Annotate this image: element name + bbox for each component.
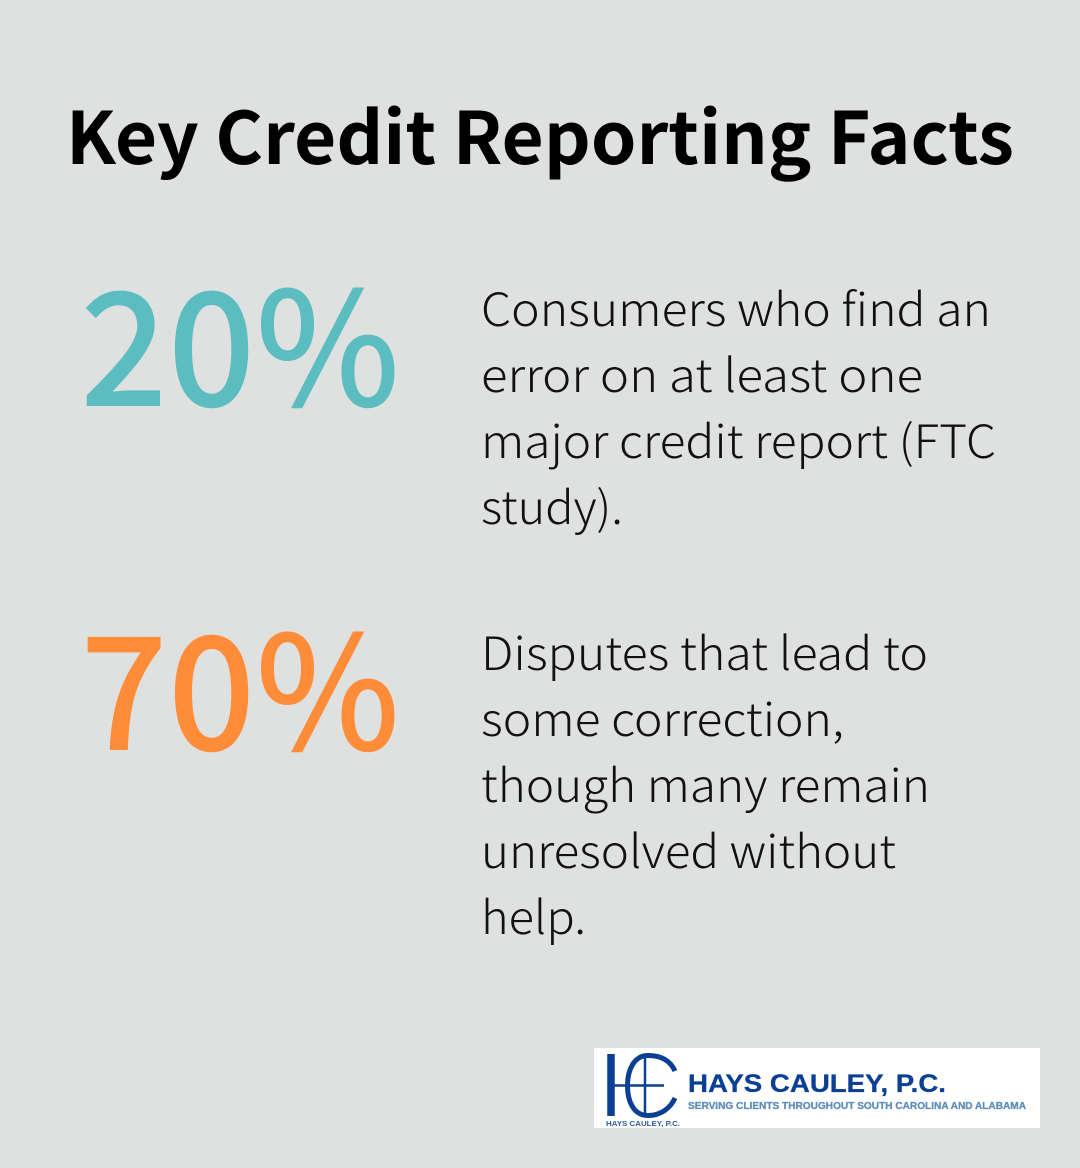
text block: 20% description: Consumers who find an — [481, 274, 991, 340]
logo small caption: HAYS CAULEY, P.C. — [606, 1119, 680, 1128]
text block: 20% description: error on at least one — [481, 340, 923, 406]
text block: 20% description: study). — [481, 472, 623, 538]
text block: 70% description: Disputes that lead to — [481, 618, 928, 684]
logo tagline: SERVING CLIENTS THROUGHOUT SOUTH CAROLINA AND ALABAMA — [688, 1100, 1026, 1112]
stat: 20%: 20% — [80, 223, 400, 452]
logo: Hays Cauley, P.C. — [594, 1048, 1040, 1128]
icon: HC monogram — [611, 1054, 675, 1116]
text block: 70% description: help. — [481, 882, 586, 948]
text block: 20% description: major credit report (FTC — [481, 406, 996, 472]
text block: 70% description: unresolved without — [481, 816, 896, 882]
text block: 20% description — [481, 274, 996, 538]
stat: 70%: 70% — [80, 567, 400, 796]
text block: 70% description: some correction, — [481, 684, 844, 750]
text block: 70% description — [481, 618, 930, 948]
text block: 70% description: though many remain — [481, 750, 930, 816]
title: Key Credit Reporting Facts — [66, 80, 1014, 185]
logo name: HAYS CAULEY, P.C. — [688, 1070, 946, 1098]
